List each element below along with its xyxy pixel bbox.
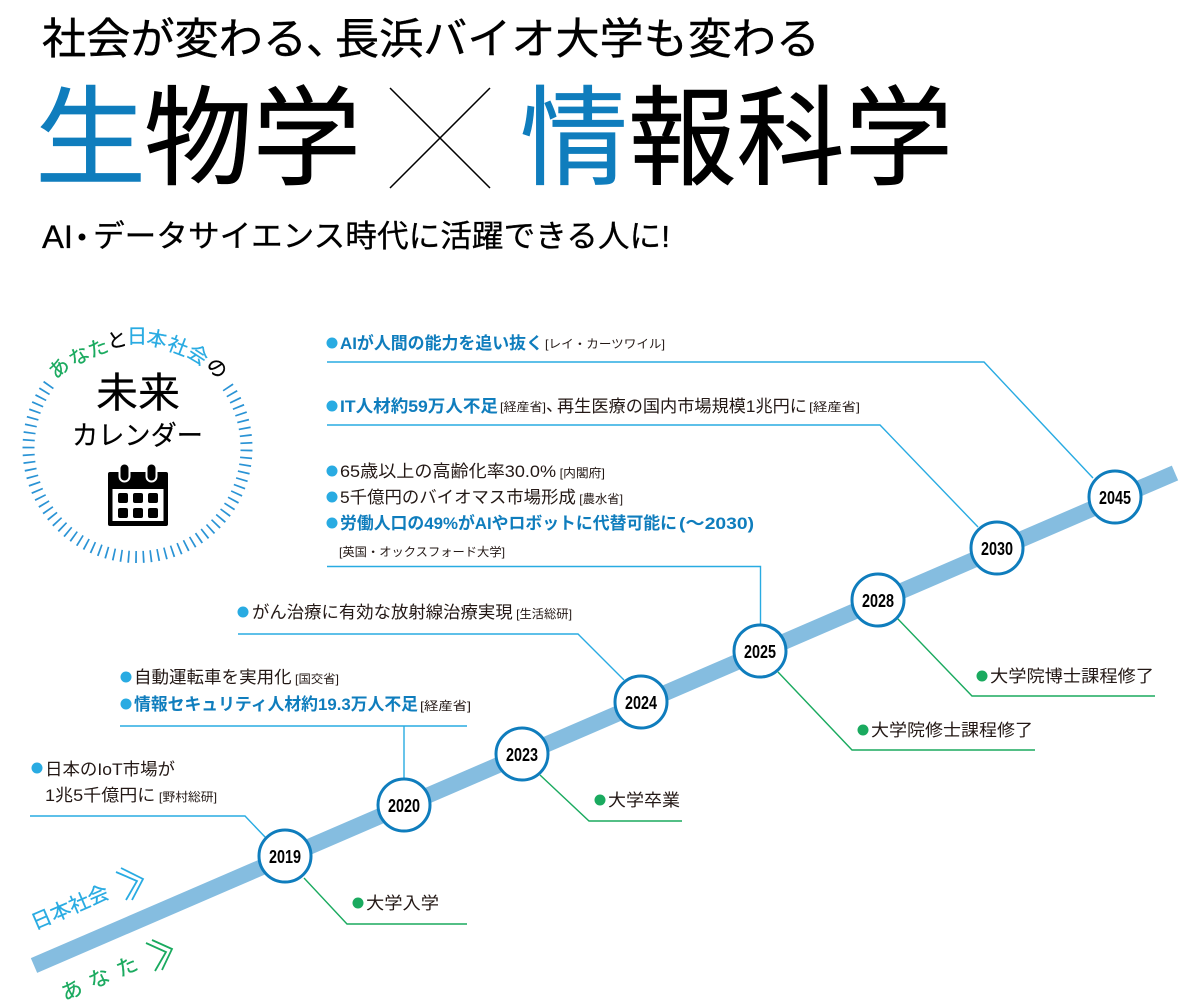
label: 日本社会 bbox=[28, 868, 143, 935]
milestone: 大学入学 bbox=[304, 878, 467, 924]
arc heading: 会 bbox=[183, 340, 212, 371]
callout: 2030: 再生医療の国内市場規模1兆円に bbox=[557, 397, 807, 416]
arc heading: と bbox=[105, 328, 129, 354]
year markers: 2023 bbox=[506, 744, 538, 765]
callout: 2030 bbox=[326, 396, 978, 527]
arc heading: あ bbox=[45, 354, 75, 384]
arc heading: 日 bbox=[127, 326, 147, 348]
year markers: 2025 bbox=[744, 641, 776, 662]
timeline band bbox=[34, 473, 1175, 966]
milestone: 大学院修士課程修了: 大学院修士課程修了 bbox=[871, 721, 1033, 740]
callout: 2019: 日本のIoT市場が bbox=[45, 760, 175, 779]
label: 日本社会: 日本社会 bbox=[28, 881, 112, 935]
callout: 2030: [経産省] bbox=[809, 400, 860, 414]
callout: 2045: [レイ・カーツワイル] bbox=[545, 337, 665, 351]
callout: 2025: 5千億円のバイオマス市場形成 [農水省] bbox=[340, 488, 623, 507]
title: tagline: 長浜バイオ大学も変わる bbox=[335, 16, 820, 64]
year markers: 2028 bbox=[862, 590, 894, 611]
heading: biology times information science: 情 bbox=[520, 78, 628, 199]
heading: biology times information science: 生 bbox=[35, 78, 146, 199]
milestone: 大学院博士課程修了 bbox=[897, 618, 1155, 696]
callout: 2020: 情報セキュリティ人材約19.3万人不足 bbox=[134, 695, 418, 714]
callout: 2030: 、 bbox=[546, 396, 563, 415]
arc heading: た bbox=[85, 335, 112, 363]
callout: 2025 bbox=[326, 462, 760, 625]
arc heading bbox=[45, 326, 231, 384]
title: tagline bbox=[42, 16, 820, 64]
title: tagline: 、 bbox=[306, 16, 349, 64]
callout: 2019: 1兆5千億円に [野村総研] bbox=[45, 786, 217, 805]
label: あなた bbox=[58, 940, 172, 1004]
callout: 2025: 65歳以上の高齢化率30.0% [内閣府] bbox=[340, 462, 605, 481]
heading: biology times information science: 報科学 bbox=[628, 78, 953, 199]
callout: 2045 bbox=[326, 333, 1093, 478]
callout: 2025: 労働人口の49%がAIやロボットに代替可能に bbox=[340, 513, 677, 533]
callout: 2045: AIが人間の能力を追い抜く bbox=[340, 333, 543, 353]
year markers: 2024 bbox=[625, 692, 658, 713]
subtitle: AI bbox=[42, 219, 73, 255]
icon: calendar bbox=[108, 464, 168, 526]
callout: 2019 bbox=[30, 760, 266, 838]
milestone: 大学院博士課程修了: 大学院博士課程修了 bbox=[990, 667, 1154, 686]
tick ring bbox=[28, 384, 246, 557]
heading: biology times information science bbox=[35, 78, 953, 199]
milestone: 大学卒業 bbox=[540, 775, 682, 821]
year markers: 2045 bbox=[1099, 487, 1131, 508]
calendar badge bbox=[28, 326, 246, 557]
arc heading: 本 bbox=[145, 326, 169, 353]
heading: biology times information science: 物学 bbox=[144, 78, 361, 199]
callout: 2020 bbox=[120, 668, 471, 778]
arc heading: の bbox=[201, 354, 231, 384]
label: あなた: あなた bbox=[58, 949, 150, 1004]
callout: 2020: 自動運転車を実用化 [国交省] bbox=[134, 668, 339, 687]
callout: 2025: [英国・オックスフォード大学] bbox=[339, 544, 505, 559]
year markers: 2030 bbox=[981, 538, 1013, 559]
milestone: 大学院修士課程修了 bbox=[778, 672, 1035, 750]
milestone: 大学卒業: 大学卒業 bbox=[608, 791, 680, 810]
title: tagline: 社会が変わる bbox=[42, 16, 307, 64]
badge title: 未来 bbox=[96, 370, 180, 416]
year markers: 2019 bbox=[269, 846, 301, 867]
callout: 2030: IT人材約59万人不足 bbox=[340, 397, 498, 416]
callout: 2024 bbox=[238, 603, 624, 680]
subtitle: データサイエンス時代に活躍できる人に! bbox=[93, 219, 670, 254]
year markers bbox=[259, 471, 1141, 882]
callout: 2024: がん治療に有効な放射線治療実現 [生活総研] bbox=[252, 603, 572, 622]
callout: 2020: [経産省] bbox=[420, 699, 471, 713]
callout: 2025: (〜2030) bbox=[679, 514, 754, 533]
milestone: 大学入学: 大学入学 bbox=[366, 894, 439, 913]
arc heading: な bbox=[65, 342, 94, 371]
arc heading: 社 bbox=[164, 332, 191, 361]
calendar badge: カレンダー bbox=[72, 421, 203, 451]
year markers: 2020 bbox=[388, 795, 420, 816]
callout: 2030: [経産省] bbox=[500, 400, 546, 414]
